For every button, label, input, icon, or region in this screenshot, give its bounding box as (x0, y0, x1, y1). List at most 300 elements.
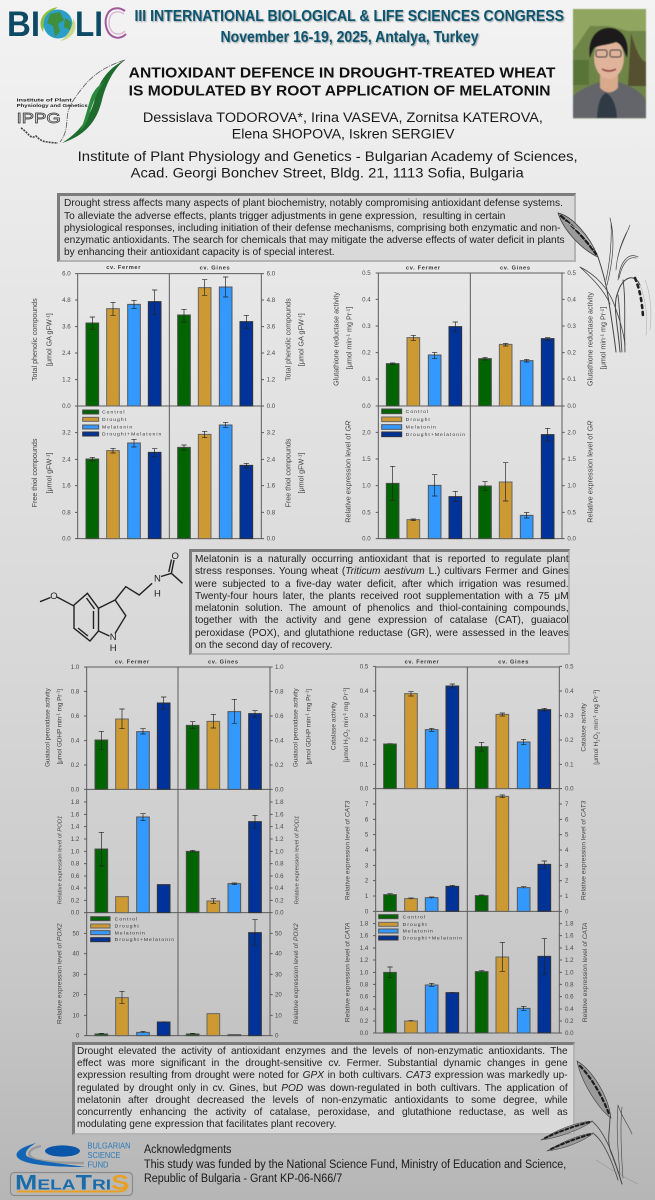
legend: Drought+Melatonin (102, 431, 162, 437)
axis titles: [μmol gFW (45, 459, 53, 493)
tick labels: 1.2 (267, 377, 276, 384)
tick labels: 6.0 (62, 271, 71, 278)
tick labels: 1 (365, 893, 369, 900)
axis titles: min (593, 719, 600, 732)
tick labels: 0.0 (267, 536, 276, 543)
legend: Melatonin (406, 424, 437, 430)
axis titles: O (343, 732, 350, 737)
tick labels: 0.0 (62, 536, 71, 543)
tick labels: 1.0 (275, 664, 284, 671)
tick labels: 0.0 (71, 786, 80, 793)
axis titles: Total phenolic compounds (31, 298, 39, 381)
axis titles: ] (599, 307, 607, 309)
tick labels: 0.6 (565, 994, 574, 1001)
axis titles (44, 687, 312, 767)
axis titles: Catalase activity (330, 701, 337, 750)
axis titles: -1 (599, 308, 604, 313)
axis titles: -1 (345, 308, 350, 313)
axis titles: [μmol min (345, 338, 353, 369)
tick labels: 0.8 (565, 981, 574, 988)
bars (86, 425, 253, 539)
tick labels: 0.0 (275, 786, 284, 793)
tick labels: 1.5 (362, 456, 371, 463)
axis titles: mg Pr (56, 694, 63, 713)
bars (384, 796, 551, 911)
legend: Control (102, 410, 126, 416)
chart axes (373, 666, 562, 789)
tick labels: 0.0 (565, 1030, 574, 1037)
tick labels: 0.6 (71, 873, 80, 880)
melatonin and methods text panel: stress responses. Young wheat (Triticum aestivum L.) cultivars Fermer and Gines (195, 565, 569, 577)
intro text panel (57, 193, 576, 262)
tick labels: 3.6 (267, 324, 276, 331)
axis titles: -1 (592, 691, 597, 696)
intro text panel: Drought stress affects many aspects of plant biochemistry, notably compromising antioxidant defense systems. (64, 197, 562, 209)
conclusions text panel: concurrently enhancing the activity of catalase, peroxidase, and glutathione reductase, as well as (77, 1106, 568, 1118)
tick labels: 0.6 (71, 713, 80, 720)
conclusions text panel: modulating gene expression that facilitates plant recovery. (77, 1118, 337, 1130)
tick labels: 1.8 (275, 799, 284, 806)
error bars (99, 697, 258, 749)
tick labels: 0.0 (360, 1030, 369, 1037)
axis titles: -1 (342, 712, 347, 717)
cultivar labels: cv. Fermer (115, 659, 150, 665)
congress title: III INTERNATIONAL BIOLOGICAL & LIFE SCIENCES CONGRESS (134, 8, 564, 25)
melatonin molecule: O (50, 591, 58, 602)
IPPG institute logo (17, 60, 125, 143)
axis titles: [μmol GA gFW (45, 319, 53, 366)
axis titles: -1 (45, 454, 50, 459)
poster title: ANTIOXIDANT DEFENCE IN DROUGHT-TREATED WHEAT (129, 64, 555, 82)
affiliation: Acad. Georgi Bonchev Street, Bldg. 21, 1113 Sofia, Bulgaria (131, 166, 524, 181)
axis titles: -1 (304, 690, 309, 694)
tick labels: 1.4 (360, 945, 369, 952)
tick labels: 2.4 (62, 456, 71, 463)
cultivar labels (406, 265, 531, 272)
chart axes (75, 274, 264, 406)
tick labels: 0.8 (267, 509, 276, 516)
tick labels: 1.4 (71, 824, 80, 831)
axis titles: O (593, 734, 600, 739)
cultivar labels: cv. Gines (500, 265, 531, 271)
tick labels (62, 271, 276, 410)
bars (384, 956, 551, 1033)
tick labels: 0.0 (565, 786, 574, 793)
axis titles (31, 298, 306, 381)
Bulgarian Science Fund logo: BULGARIAN (88, 1142, 131, 1150)
tick labels: 1.5 (567, 456, 576, 463)
tick labels: 2.0 (362, 429, 371, 436)
axis titles: Relative expression level of CATA (344, 922, 351, 1022)
tick labels: 0.1 (565, 761, 574, 768)
tick labels: 3.2 (267, 430, 276, 437)
melatonin molecule: N (110, 632, 117, 643)
intro text panel: by enhancing their antioxidant capacity is of special interest. (64, 246, 334, 258)
chart axes (84, 789, 273, 913)
legend: Control (406, 409, 429, 415)
cultivar labels: cv. Gines (200, 266, 230, 272)
tick labels: 0.4 (362, 296, 371, 303)
axis titles: mg Pr (343, 693, 350, 713)
axis titles: -1 (45, 315, 50, 319)
axis titles: Catalase activity (581, 702, 588, 752)
axis titles: ] (345, 307, 353, 309)
tick labels: 10 (275, 1012, 282, 1019)
legend: Drought (406, 417, 431, 423)
axis titles: Relative expression level of POD1 (295, 816, 301, 904)
tick labels: 0.8 (62, 509, 71, 516)
tick labels: 0.4 (360, 688, 369, 695)
axis titles: ] (298, 313, 306, 315)
tick labels: 0 (365, 908, 369, 915)
tick labels: 0.2 (565, 1018, 574, 1025)
bars (86, 287, 253, 406)
tick labels (365, 801, 569, 915)
axis titles: 2 (596, 739, 601, 742)
tick labels: 2.0 (567, 429, 576, 436)
axis titles: Relative expression level of CAT3 (344, 800, 351, 900)
tick labels: 1.4 (565, 945, 574, 952)
chart: relative expression level of GR (344, 406, 595, 543)
tick labels: 6 (365, 816, 369, 823)
cultivar labels: cv. Fermer (405, 659, 440, 665)
tick labels: 0 (76, 1033, 80, 1040)
tick labels (362, 429, 576, 543)
axis titles: -1 (599, 334, 604, 338)
chart: free thiol compounds (31, 406, 306, 543)
chart: relative expression level of POX2 (56, 913, 300, 1040)
axis titles: ] (298, 453, 306, 455)
bars (384, 686, 551, 789)
tick labels: 1.6 (71, 811, 80, 818)
chart axes (373, 911, 562, 1033)
axis titles: mg Pr (599, 312, 607, 334)
chart: total phenolic compounds (31, 265, 306, 410)
melatonin molecule: N (154, 574, 161, 584)
error bars (390, 322, 550, 364)
conclusions text panel: expression resulting from drought were noted for GPX in both cultivars. CAT3 expression was markedly up- (77, 1069, 568, 1081)
BIOLIC congress logo: BI (7, 5, 40, 44)
acknowledgments (144, 1144, 566, 1185)
axis titles: Relative expression level of POX2 (56, 923, 63, 1024)
tick labels: 0.5 (567, 509, 576, 516)
tick labels: 0.2 (362, 350, 371, 357)
error bars (387, 939, 547, 1022)
conclusions text panel: effect was more significant in the drought-sensitive cv. Fermer. Substantial dynamic changes in gene (77, 1057, 568, 1069)
intro text panel: enzymatic antioxidants. The search for chemicals that may mitigate the adverse effects of water deficit in plants (64, 234, 564, 246)
cultivar labels (106, 265, 230, 272)
tick labels (360, 663, 574, 793)
axis titles: Glutathione reductase activity (587, 292, 595, 386)
tick labels (71, 664, 284, 793)
axis titles: -1 (55, 690, 60, 694)
axis titles: mg Pr (593, 695, 600, 715)
tick labels: 0.3 (360, 713, 369, 720)
tick labels: 0.5 (362, 509, 371, 516)
legend: Melatonin (403, 929, 434, 935)
axis titles: -1 (342, 689, 347, 693)
cultivar labels (405, 659, 529, 665)
tick labels: 0.8 (275, 861, 284, 868)
tick labels: 0.4 (565, 1006, 574, 1013)
axis titles: Total phenolic compounds (284, 298, 292, 381)
axis titles: Relative expression level of CATA (582, 922, 589, 1022)
tick labels: 2 (565, 878, 569, 885)
chart axes (376, 406, 565, 539)
axis titles: 2 (346, 736, 351, 739)
bars (95, 703, 261, 789)
chart axes (373, 789, 562, 911)
conclusions text panel: Drought elevated the activity of antioxidant enzymes and the levels of non-enzymatic antioxidants. The (77, 1045, 568, 1057)
chart axes (84, 913, 273, 1036)
tick labels: 6.0 (267, 271, 276, 278)
tick labels: 50 (72, 930, 80, 937)
tick labels: 1.2 (275, 836, 284, 843)
tick labels: 40 (275, 951, 282, 958)
axis titles: -1 (345, 334, 350, 338)
tick labels: 1.0 (275, 848, 284, 855)
tick labels: 0.1 (362, 376, 371, 383)
tick labels: 5 (565, 832, 569, 839)
tick labels: 1.0 (362, 483, 371, 490)
cultivar labels: cv. Fermer (106, 265, 141, 271)
cultivar labels: cv. Gines (498, 659, 529, 665)
tick labels: 30 (275, 971, 282, 978)
error bars (90, 277, 249, 330)
tick labels: 4 (365, 847, 369, 854)
tick labels: 0.2 (275, 762, 284, 769)
melatonin and methods text panel: together with the activity and gene expression of catalase (CAT), guaiacol (195, 614, 569, 626)
tick labels: 0.5 (362, 270, 371, 277)
axis titles: Guaiacol peroxidase activity (44, 687, 51, 767)
tick labels: 3 (565, 862, 569, 869)
tick labels: 1.0 (71, 664, 80, 671)
axis titles: Relative expression level of POX2 (293, 923, 300, 1024)
chart: catalase activity (330, 659, 601, 793)
axis titles: 2 (346, 729, 351, 732)
error bars (99, 920, 258, 1035)
axis titles: [μmol H (343, 739, 350, 762)
poster title: IS MODULATED BY ROOT APPLICATION OF MELATONIN (129, 82, 550, 99)
IPPG institute logo: IPPG (17, 110, 61, 127)
tick labels: 0.8 (71, 688, 80, 695)
tick labels: 0.1 (567, 376, 576, 383)
chart: relative expression level of POD1 (57, 789, 301, 917)
tick labels: 1.0 (565, 969, 574, 976)
tick labels: 1.6 (360, 933, 369, 940)
authors: Dessislava TODOROVA*, Irina VASEVA, Zornitsa KATEROVA, (143, 110, 543, 125)
axis titles: mg Pr (305, 694, 312, 713)
tick labels: 1.2 (565, 957, 574, 964)
Bulgarian Science Fund logo (17, 1142, 131, 1170)
tick labels: 0.2 (71, 897, 80, 904)
bars (386, 435, 554, 539)
axis titles: ] (45, 313, 53, 315)
tick labels: 0.8 (71, 861, 80, 868)
axis titles: ] (305, 689, 312, 691)
tick labels: 4.8 (62, 297, 71, 304)
tick labels (72, 930, 282, 1040)
bars (95, 817, 261, 913)
axis titles: [μmol GDHP min (56, 717, 63, 764)
tick labels: 0 (275, 1033, 279, 1040)
tick labels: 0.3 (567, 323, 576, 330)
legend: Drought (102, 417, 127, 423)
tick labels: 1.0 (360, 969, 369, 976)
tick labels: 0.4 (275, 885, 284, 892)
axis titles: -1 (304, 713, 309, 717)
tick labels: 40 (72, 951, 80, 958)
legend: Drought+Melatonin (406, 432, 466, 438)
axis titles: Relative expression level of GR (344, 420, 353, 523)
tick labels: 3 (365, 862, 369, 869)
axis titles: Guaiacol peroxidase activity (293, 687, 300, 767)
tick labels: 0.0 (71, 910, 80, 917)
tick labels: 10 (72, 1012, 80, 1019)
tick labels: 2.4 (267, 350, 276, 357)
axis titles: ] (56, 689, 63, 691)
chart: relative expression level of CATA (344, 911, 589, 1037)
legend: Drought (115, 924, 140, 930)
bars (95, 933, 261, 1036)
tick labels (62, 430, 276, 543)
melatonin molecule: H (110, 643, 117, 654)
tick labels: 0.0 (62, 403, 71, 410)
axis titles: [μmol GDHP min (305, 717, 312, 764)
congress title: November 16-19, 2025, Antalya, Turkey (220, 29, 479, 46)
chart axes (376, 273, 565, 406)
tick labels: 4 (565, 847, 569, 854)
intro text panel: physiological responses, including initiation of their defense mechanisms, comprising both enzymatic and non- (64, 222, 560, 234)
tick labels: 50 (275, 930, 282, 937)
axis titles: [μmol min (599, 338, 607, 369)
axis titles: mg Pr (345, 312, 353, 334)
tick labels: 0.6 (275, 873, 284, 880)
tick labels: 0.2 (565, 737, 574, 744)
axis titles: Free thiol compounds (31, 438, 39, 507)
cultivar labels (115, 659, 239, 665)
axis titles: Glutathione reductase activity (333, 292, 341, 386)
congress title (134, 8, 564, 46)
melatonin molecule: H (154, 588, 161, 600)
tick labels: 1.2 (62, 377, 71, 384)
tick labels: 1.6 (62, 483, 71, 490)
legend: Drought+Melatonin (115, 937, 175, 943)
tick labels: 30 (72, 971, 80, 978)
axis titles: 2 (596, 731, 601, 734)
conclusions text panel: melatonin after drought decreased the levels of non-enzymatic antioxidants to some degree, while (77, 1094, 568, 1106)
chart: guaiacol peroxidase activity (44, 659, 312, 793)
tick labels: 1 (565, 893, 569, 900)
tick labels: 0.4 (565, 688, 574, 695)
legend: Drought+Melatonin (403, 936, 463, 942)
authors (143, 110, 543, 142)
tick labels: 2 (365, 878, 369, 885)
tick labels: 0 (565, 908, 569, 915)
tick labels: 0.2 (360, 737, 369, 744)
legend (91, 916, 175, 943)
tick labels: 2.4 (62, 350, 71, 357)
tick labels: 0.2 (360, 1018, 369, 1025)
tick labels: 0.4 (71, 738, 80, 745)
melatonin and methods text panel (189, 549, 570, 655)
tick labels: 0.4 (71, 885, 80, 892)
axis titles (330, 687, 601, 765)
axis titles: -1 (298, 315, 303, 319)
axis titles: -1 (298, 454, 303, 459)
error bars (387, 795, 547, 899)
melatonin molecule (40, 551, 182, 654)
Bulgarian Science Fund logo: SCIENCE (88, 1151, 120, 1160)
tick labels: 0.4 (567, 296, 576, 303)
axis titles (56, 923, 300, 1024)
axis titles (333, 292, 607, 386)
tick labels: 4.8 (267, 297, 276, 304)
Bulgarian Science Fund logo: FUND (88, 1160, 109, 1170)
authors: Elena SHOPOVA, Iskren SERGIEV (232, 127, 454, 142)
tick labels: 1.4 (275, 824, 284, 831)
melatonin and methods text panel: on the second day of recovery. (195, 639, 333, 651)
axis titles: Relative expression level of GR (586, 420, 595, 523)
axis titles: Relative expression level of CAT3 (581, 800, 588, 900)
tick labels: 1.0 (71, 848, 80, 855)
tick labels: 5 (365, 832, 369, 839)
tick labels: 0.8 (275, 688, 284, 695)
axis titles (31, 438, 306, 507)
affiliation (78, 149, 578, 181)
BIOLIC congress logo (7, 5, 126, 44)
tick labels: 0.0 (362, 403, 371, 410)
error bars (387, 684, 547, 751)
tick labels: 0.0 (360, 786, 369, 793)
legend: Control (403, 914, 426, 920)
tick labels (360, 921, 574, 1037)
tick labels: 7 (565, 801, 569, 808)
tick labels: 0.6 (275, 713, 284, 720)
intro text panel: To alleviate the adverse effects, plants trigger adjustments in gene expression, resulting in certain (64, 210, 505, 222)
legend (382, 409, 466, 438)
error bars (90, 422, 249, 468)
tick labels: 0.8 (360, 981, 369, 988)
tick labels: 0.5 (567, 270, 576, 277)
axis titles (344, 922, 589, 1022)
affiliation: Institute of Plant Physiology and Genetics - Bulgarian Academy of Sciences, (78, 149, 578, 164)
tick labels (362, 270, 576, 410)
IPPG institute logo: Institute of Plant (17, 98, 72, 102)
BIOLIC congress logo: LI (75, 5, 103, 44)
tick labels: 0.4 (275, 738, 284, 745)
poster title (129, 64, 555, 99)
legend: Drought (403, 922, 428, 928)
axis titles: [μmol GA gFW (298, 319, 306, 366)
chart: glutathione reductase activity (333, 265, 607, 410)
legend: Melatonin (115, 930, 146, 936)
tick labels: 1.6 (275, 811, 284, 818)
axis titles (344, 800, 588, 900)
tick labels: 1.8 (360, 921, 369, 928)
axis titles: [μmol H (593, 742, 600, 765)
tick labels: 0.0 (275, 910, 284, 917)
bars (386, 327, 554, 406)
tick labels: 1.2 (360, 957, 369, 964)
chart axes (84, 667, 273, 789)
axis titles: [μmol gFW (298, 459, 306, 493)
tick labels: 0.5 (565, 663, 574, 670)
conclusions text panel (72, 1042, 575, 1135)
axis titles: ] (343, 687, 350, 689)
chart: relative expression level of CAT3 (344, 789, 588, 915)
melatonin and methods text panel: peroxidase (POX), and glutathione reductase (GR), were assessed in the leaves (195, 627, 569, 639)
